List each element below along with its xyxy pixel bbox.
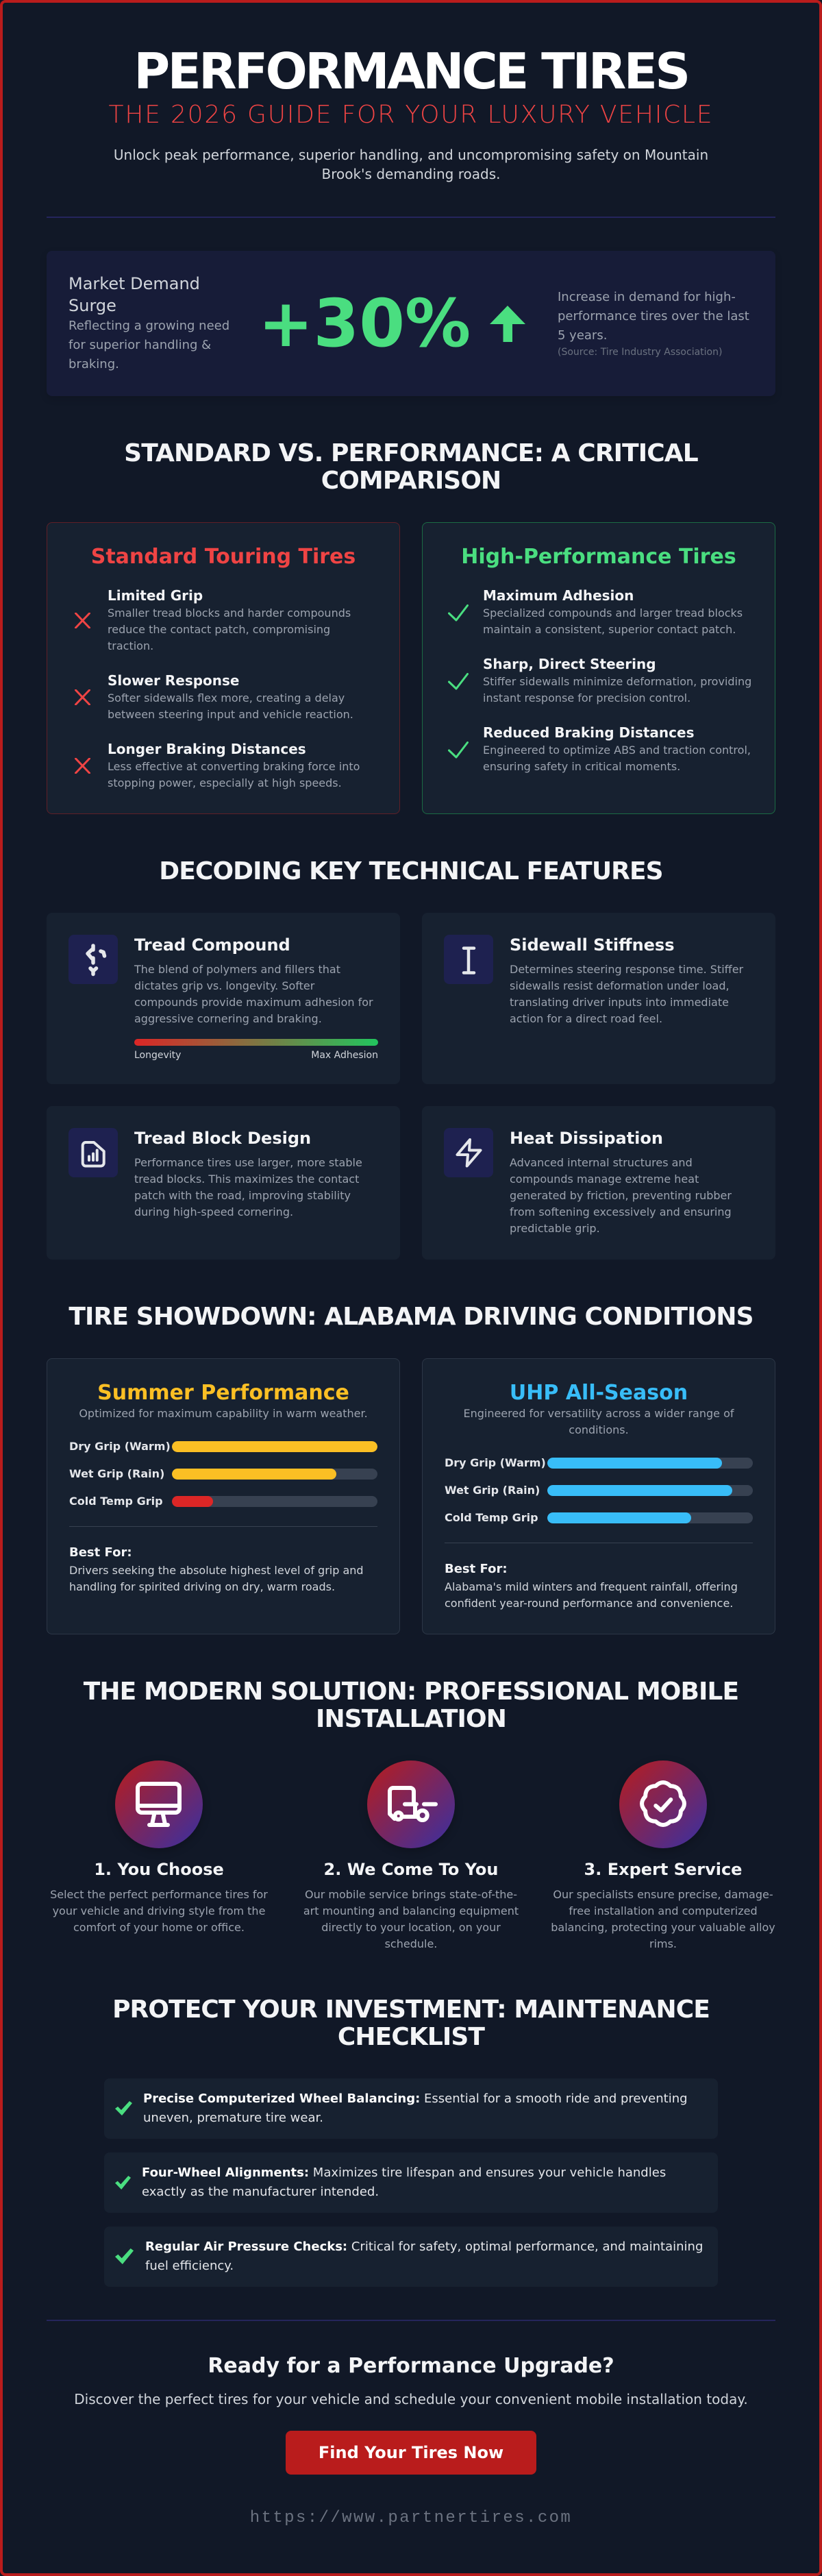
- item: sharp steering: [448, 656, 751, 704]
- step text: Our mobile service brings state-of-the-: [305, 1888, 517, 1901]
- stat description: Increase in demand for high-: [558, 290, 736, 304]
- label: dry grip: Dry Grip (Warm): [445, 1456, 546, 1469]
- item text: [483, 675, 751, 704]
- card text: [134, 963, 373, 1025]
- checklist item: wheel balancing: [104, 2078, 718, 2139]
- best for text: [445, 1580, 738, 1610]
- card text: Advanced internal structures and: [510, 1156, 693, 1169]
- icon: check: [115, 2248, 134, 2264]
- item: maximum adhesion: [448, 587, 743, 636]
- subtitle: THE 2026 GUIDE FOR YOUR LUXURY VEHICLE: [109, 101, 713, 129]
- stat label: Market Demand: [68, 274, 200, 293]
- label: cold grip: Cold Temp Grip: [69, 1495, 163, 1508]
- heading: comparison: STANDARD VS. PERFORMANCE: A CRITICAL: [124, 439, 698, 467]
- step text: rims.: [649, 1937, 677, 1950]
- item text: ensuring safety in critical moments.: [483, 760, 680, 773]
- cta text: Discover the perfect tires for your vehicle and schedule your convenient mobile installation today.: [74, 2391, 748, 2407]
- panel: tread compound: [47, 913, 400, 1084]
- icon: check: [115, 2176, 131, 2189]
- step 3: [551, 1761, 775, 1950]
- panel heading: UHP All-Season: [510, 1381, 688, 1405]
- panel: sidewall stiffness: [422, 913, 775, 1084]
- gradient scale: [134, 1039, 378, 1046]
- best for text: Alabama's mild winters and frequent rainfall, offering: [445, 1580, 738, 1593]
- scale label: low: Longevity: [134, 1050, 181, 1061]
- panel heading: High-Performance Tires: [461, 545, 736, 569]
- card text: predictable grip.: [510, 1222, 600, 1235]
- item text: [108, 760, 360, 789]
- item title: Longer Braking Distances: [108, 741, 306, 757]
- stat label: Surge: [68, 296, 116, 315]
- label: cold grip: Cold Temp Grip: [445, 1511, 538, 1524]
- best for text: confident year-round performance and convenience.: [445, 1597, 733, 1610]
- card text: compounds provide maximum adhesion for: [134, 996, 373, 1009]
- icon: check: [448, 741, 469, 759]
- item: longer braking: [75, 741, 360, 789]
- panel subtitle: [463, 1407, 734, 1436]
- panel: market demand stat: [47, 251, 775, 396]
- card text: The blend of polymers and fillers that: [134, 963, 340, 976]
- card text: generated by friction, preventing rubber: [510, 1189, 732, 1202]
- step text: balancing, protecting your valuable alloy: [551, 1921, 775, 1934]
- step text: Select the perfect performance tires for: [50, 1888, 268, 1901]
- item text: reduce the contact patch, compromising: [108, 623, 330, 636]
- icon: check: [115, 2101, 132, 2115]
- item title: Reduced Braking Distances: [483, 724, 694, 741]
- item title: Limited Grip: [108, 587, 203, 604]
- heading: comparison: [124, 439, 698, 495]
- icon: cross: [75, 613, 90, 628]
- card text: [134, 1156, 362, 1218]
- website url: https://www.partnertires.com: [250, 2509, 572, 2527]
- bar: dry grip 85%: [547, 1458, 753, 1469]
- bar chart: summer ratings: [69, 1440, 377, 1508]
- icon: check: [448, 673, 469, 690]
- cta button: Find Your Tires Now: [319, 2443, 503, 2462]
- item text: [142, 2163, 666, 2202]
- step text: [551, 1887, 775, 1952]
- label: wet grip: Wet Grip (Rain): [445, 1484, 540, 1497]
- card text: from softening excessively and ensuring: [510, 1205, 732, 1218]
- item text: [108, 606, 351, 652]
- item text: [145, 2237, 703, 2276]
- best for text: [69, 1564, 364, 1593]
- card text: tread blocks. This maximizes the contact: [134, 1173, 359, 1186]
- stat note: braking.: [68, 357, 119, 371]
- heading: mobile installation: INSTALLATION: [316, 1705, 506, 1733]
- bar chart: all-season ratings: [445, 1456, 753, 1524]
- item title: Sharp, Direct Steering: [483, 656, 656, 672]
- icon: truck: [367, 1761, 455, 1848]
- panel: tread block design: [47, 1106, 400, 1260]
- step text: your vehicle and driving style from the: [53, 1904, 265, 1917]
- cta heading: Ready for a Performance Upgrade?: [208, 2354, 614, 2378]
- intro text: Unlock peak performance, superior handling, and uncompromising safety on Mountain: [114, 147, 708, 163]
- card title: Tread Block Design: [134, 1129, 311, 1148]
- stat note: for superior handling &: [68, 338, 211, 352]
- item text: Softer sidewalls flex more, creating a delay: [108, 691, 345, 704]
- item text: [483, 606, 743, 636]
- panel: summer performance: [47, 1358, 400, 1634]
- icon: cross: [75, 758, 90, 774]
- step text: directly to your location, on your: [321, 1921, 501, 1934]
- cta button: [286, 2431, 536, 2475]
- bar: dry grip 100%: [172, 1441, 377, 1452]
- card text: aggressive cornering and braking.: [134, 1012, 322, 1025]
- panel: uhp all-season: [422, 1358, 775, 1634]
- item text: Regular Air Pressure Checks: Critical for safety, optimal performance, and maintaining: [145, 2240, 703, 2254]
- card text: during high-speed cornering.: [134, 1205, 293, 1218]
- heading: maintenance checklist: CHECKLIST: [338, 2023, 484, 2051]
- card text: Performance tires use larger, more stable: [134, 1156, 362, 1169]
- icon: cross: [75, 689, 90, 705]
- panel heading: Standard Touring Tires: [91, 545, 356, 569]
- card text: compounds manage extreme heat: [510, 1173, 699, 1186]
- bar: cold grip 70%: [547, 1512, 753, 1523]
- stat description: [558, 290, 749, 343]
- step text: free installation and computerized: [569, 1904, 758, 1917]
- panel heading: Summer Performance: [97, 1381, 349, 1405]
- step text: comfort of your home or office.: [73, 1921, 245, 1934]
- heading: technical features: DECODING KEY TECHNICAL FEATURES: [159, 857, 663, 885]
- heading: mobile installation: [84, 1678, 738, 1733]
- bar: wet grip 90%: [547, 1485, 753, 1496]
- scale label: high: Max Adhesion: [311, 1050, 378, 1061]
- panel subtitle: Engineered for versatility across a wider range of: [463, 1407, 734, 1420]
- best for heading: Best For:: [69, 1545, 132, 1560]
- step text: Our specialists ensure precise, damage-: [553, 1888, 773, 1901]
- card text: [510, 963, 744, 1025]
- stat description: performance tires over the last: [558, 309, 749, 323]
- step title: 3. Expert Service: [584, 1860, 742, 1879]
- heading: tire showdown: TIRE SHOWDOWN: ALABAMA DRIVING CONDITIONS: [68, 1303, 754, 1331]
- panel subtitle: Optimized for maximum capability in warm weather.: [79, 1407, 368, 1420]
- step text: [303, 1888, 519, 1950]
- card text: [510, 1156, 732, 1235]
- step text: [50, 1888, 268, 1934]
- intro text: [114, 147, 708, 182]
- item text: exactly as the manufacturer intended.: [142, 2185, 379, 2199]
- step text: schedule.: [385, 1937, 437, 1950]
- item text: Specialized compounds and larger tread blocks: [483, 606, 743, 620]
- intro text: Brook's demanding roads.: [322, 166, 500, 182]
- label: dry grip: Dry Grip (Warm): [69, 1440, 171, 1453]
- label: wet grip: Wet Grip (Rain): [69, 1467, 164, 1480]
- card text: translating driver inputs into immediate: [510, 996, 729, 1009]
- icon: up arrow: [490, 306, 525, 342]
- item text: Smaller tread blocks and harder compounds: [108, 606, 351, 620]
- item text: Precise Computerized Wheel Balancing: Essential for a smooth ride and preventing: [143, 2092, 688, 2106]
- best for heading: Best For:: [445, 1562, 508, 1576]
- item text: Less effective at converting braking force into: [108, 760, 360, 773]
- card text: sidewalls resist deformation under load,: [510, 979, 730, 992]
- heading: mobile installation: THE MODERN SOLUTION: PROFESSIONAL MOBILE: [84, 1678, 738, 1706]
- stat value: +30%: [258, 285, 471, 362]
- card title: Heat Dissipation: [510, 1129, 663, 1148]
- card text: action for a direct road feel.: [510, 1012, 662, 1025]
- item text: instant response for precision control.: [483, 691, 690, 704]
- icon: i-beam: [444, 935, 493, 984]
- panel: standard touring tires: [47, 522, 400, 814]
- icon: lightning bolt: [444, 1128, 493, 1177]
- item text: between steering input and vehicle reaction.: [108, 708, 353, 721]
- icon: file chart: [68, 1128, 118, 1177]
- item text: fuel efficiency.: [145, 2259, 234, 2273]
- card title: Tread Compound: [134, 935, 290, 955]
- icon: badge check: [619, 1761, 707, 1848]
- heading: comparison: COMPARISON: [321, 467, 501, 495]
- item text: [483, 744, 751, 773]
- item text: [108, 691, 353, 721]
- stat description: 5 years.: [558, 328, 607, 343]
- heading: maintenance checklist: PROTECT YOUR INVESTMENT: MAINTENANCE: [112, 1996, 710, 2024]
- item text: traction.: [108, 639, 153, 652]
- step 1: [50, 1761, 268, 1934]
- panel: heat dissipation: [422, 1106, 775, 1260]
- item text: Four-Wheel Alignments: Maximizes tire lifespan and ensures your vehicle handles: [142, 2166, 666, 2180]
- item: limited grip: [75, 587, 351, 652]
- checklist item: air pressure: [104, 2227, 718, 2287]
- icon: monitor: [115, 1761, 203, 1848]
- item text: Stiffer sidewalls minimize deformation, providing: [483, 675, 751, 688]
- item title: Slower Response: [108, 672, 240, 689]
- card text: Determines steering response time. Stiffer: [510, 963, 743, 976]
- item title: Maximum Adhesion: [483, 587, 634, 604]
- item text: stopping power, especially at high speeds.: [108, 776, 342, 789]
- bar: cold grip 20%: [172, 1496, 377, 1507]
- item text: uneven, premature tire wear.: [143, 2111, 323, 2125]
- item text: [143, 2089, 688, 2128]
- heading: maintenance checklist: [0, 1996, 822, 2051]
- item: slower response: [75, 672, 353, 721]
- header: [109, 42, 713, 182]
- step title: 1. You Choose: [94, 1860, 224, 1879]
- best for text: Drivers seeking the absolute highest level of grip and: [69, 1564, 364, 1577]
- card text: dictates grip vs. longevity. Softer: [134, 979, 314, 992]
- step title: 2. We Come To You: [324, 1860, 498, 1879]
- stat note: [68, 319, 229, 371]
- item text: maintain a consistent, superior contact patch.: [483, 623, 736, 636]
- stat source: (Source: Tire Industry Association): [558, 347, 722, 358]
- title: PERFORMANCE TIRES: [134, 42, 688, 100]
- checklist item: alignments: [104, 2152, 718, 2213]
- call to action: [0, 2353, 822, 2531]
- icon: check: [448, 604, 469, 622]
- card title: Sidewall Stiffness: [510, 935, 675, 955]
- step 2: [303, 1761, 519, 1950]
- item: reduced braking: [448, 724, 751, 773]
- card text: patch with the road, improving stability: [134, 1189, 351, 1202]
- stat label: [68, 274, 200, 315]
- stat note: Reflecting a growing need: [68, 319, 229, 333]
- icon: tread compound: [68, 935, 118, 984]
- best for text: handling for spirited driving on dry, warm roads.: [69, 1580, 335, 1593]
- item text: Engineered to optimize ABS and traction control,: [483, 744, 751, 757]
- bar: wet grip 80%: [172, 1469, 377, 1480]
- panel subtitle: conditions.: [569, 1423, 629, 1436]
- panel: high-performance tires: [422, 522, 775, 814]
- step text: art mounting and balancing equipment: [303, 1904, 519, 1917]
